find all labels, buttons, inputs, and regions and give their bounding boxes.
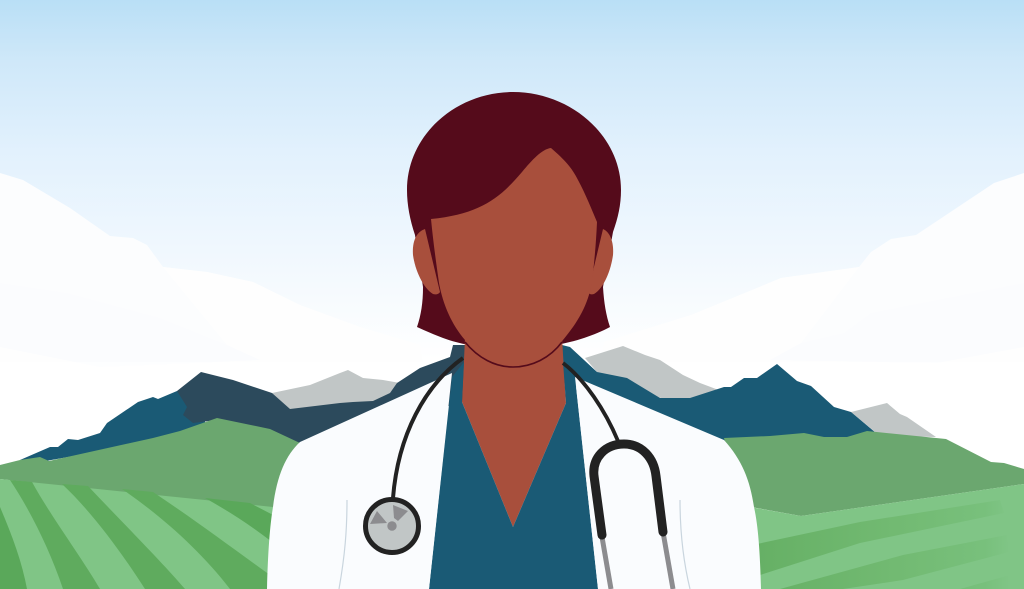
mountain range: left blue ridge: [20, 391, 205, 462]
ear tube: [594, 444, 663, 535]
hair: [407, 92, 621, 345]
sky: [0, 0, 1024, 360]
tube left: [393, 358, 463, 498]
ear tube stems: [602, 532, 673, 589]
hill: left green: [0, 418, 300, 520]
tube right: [563, 363, 618, 441]
coat fold left: [339, 500, 347, 589]
field: right with stripes: [750, 484, 1024, 589]
neck: [462, 338, 566, 527]
stethoscope: [366, 358, 673, 589]
face: [431, 148, 597, 367]
scrubs: [429, 362, 598, 589]
chin line: [465, 342, 562, 367]
left ear: [413, 229, 440, 294]
lab coat: [267, 373, 761, 589]
distant mountains: grey peaks: [272, 346, 936, 437]
doctor: [267, 92, 761, 589]
mountain range: right blue ridge: [562, 345, 876, 445]
chest piece: [366, 500, 418, 552]
hill: right green: [724, 431, 1024, 516]
field: left with stripes: [0, 479, 280, 589]
clouds: [0, 173, 1024, 482]
right ear: [588, 229, 613, 294]
mountain range: left dark ridge: [177, 345, 470, 444]
coat fold right: [680, 500, 690, 589]
